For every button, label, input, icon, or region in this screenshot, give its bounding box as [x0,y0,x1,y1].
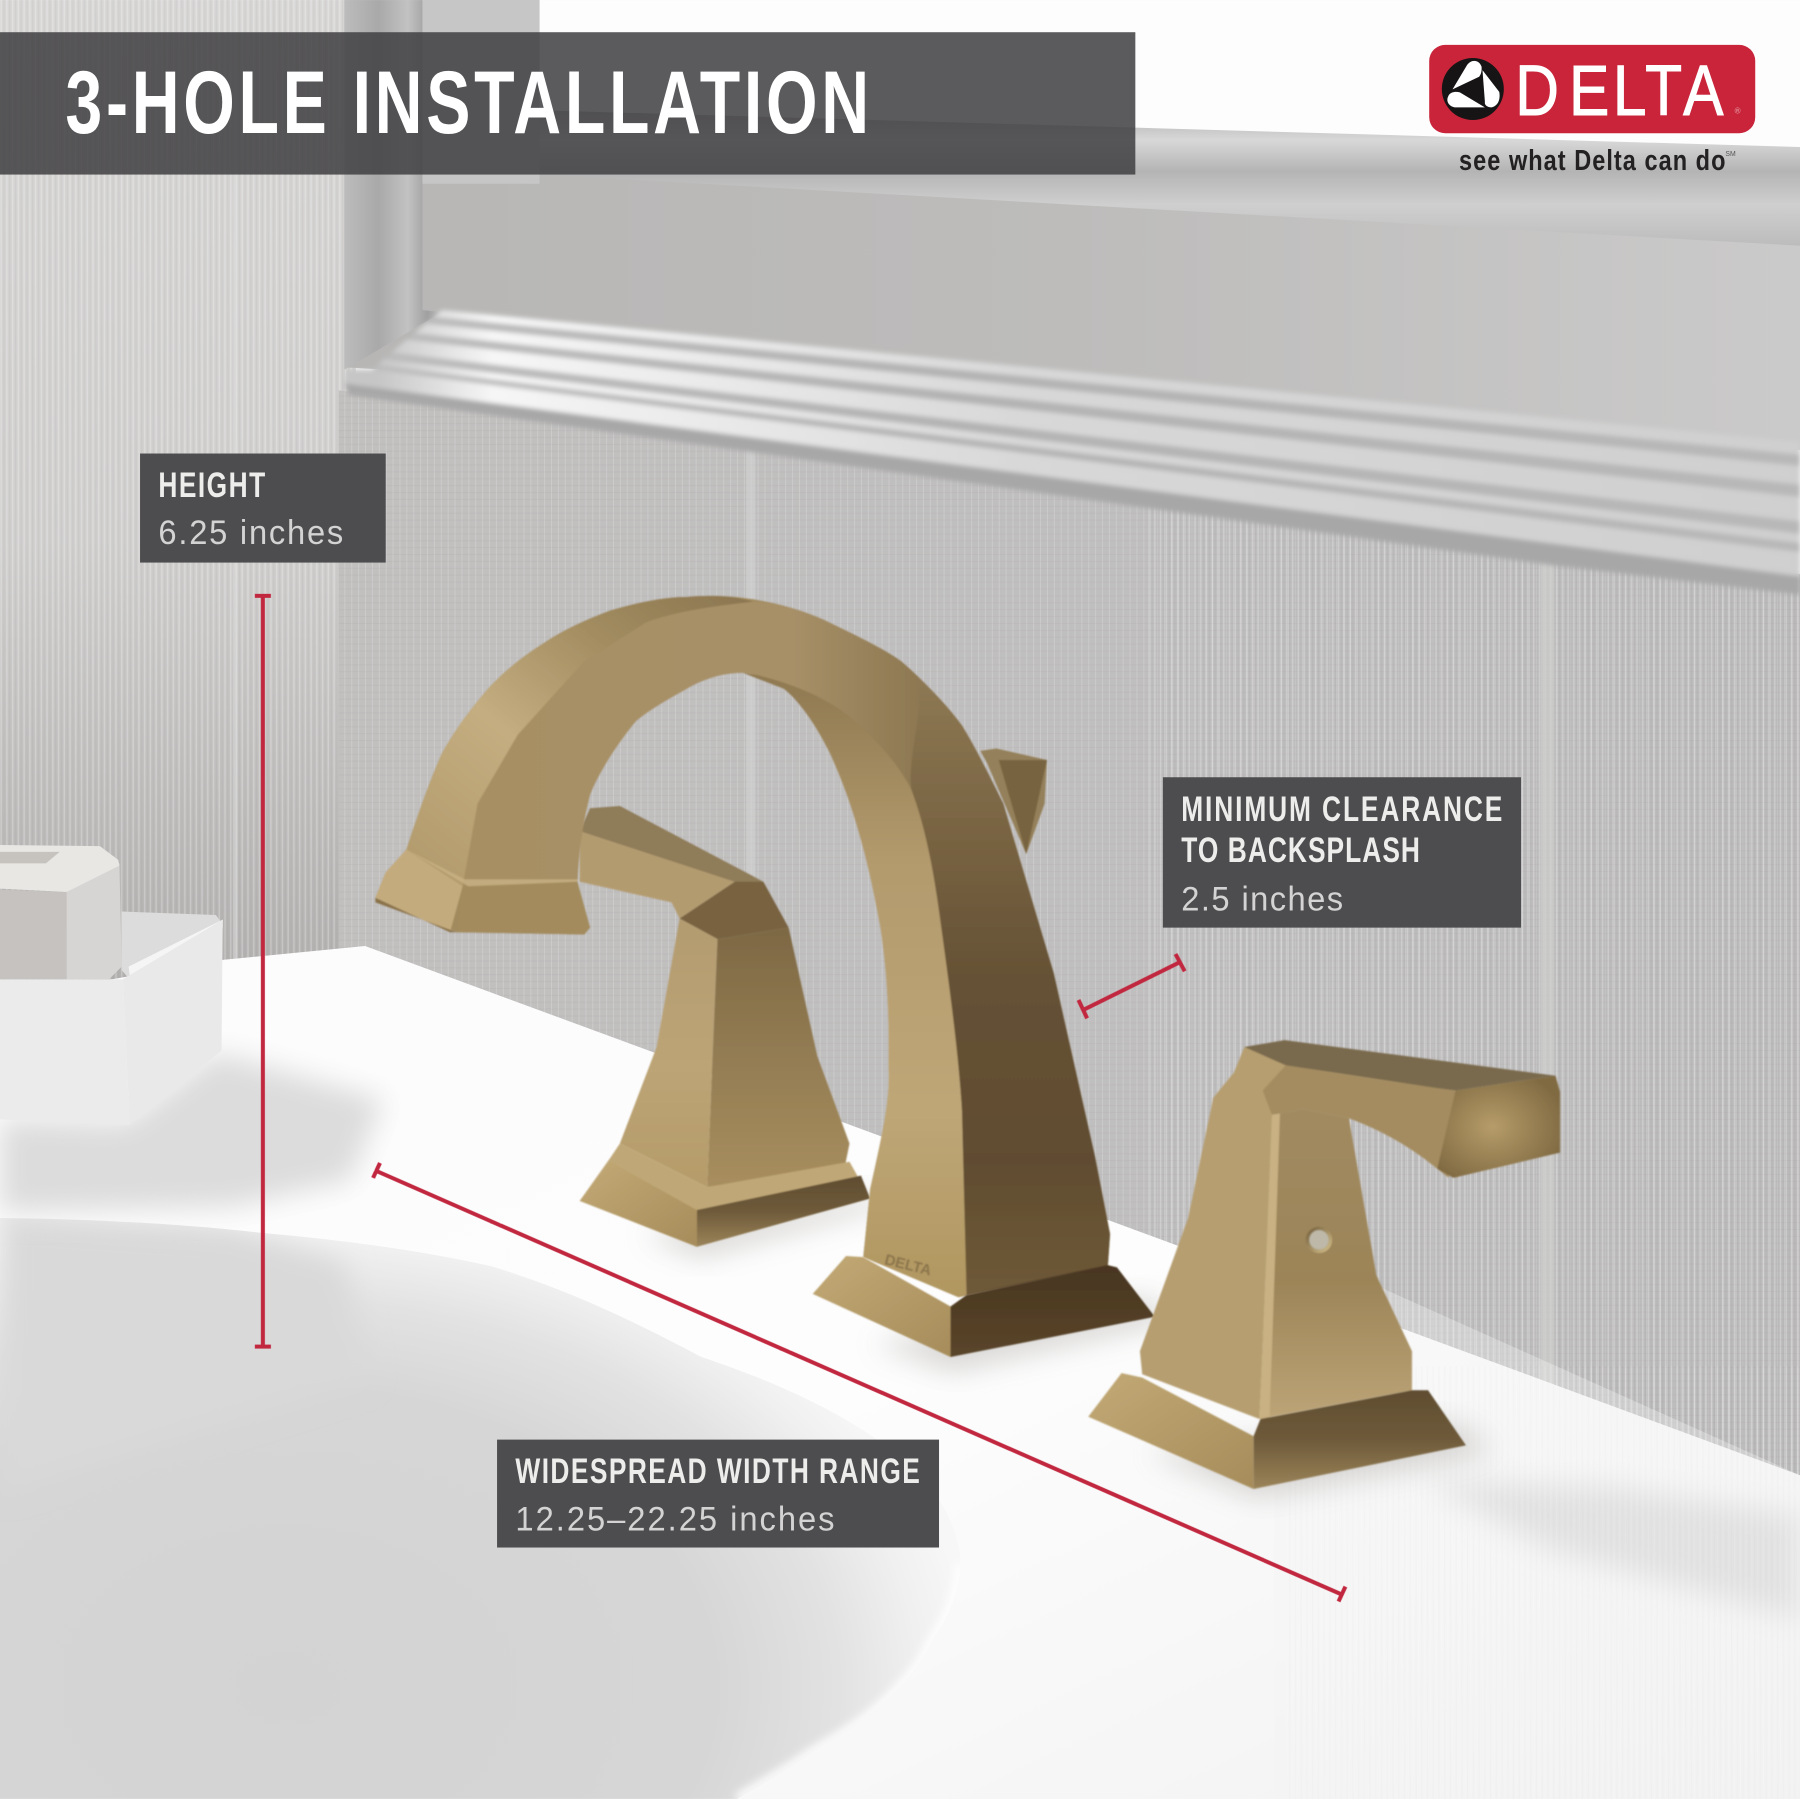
counter shadows under faucet [643,1194,1492,1498]
callout: minimum clearance: 2.5 inches [1181,881,1343,919]
dimension line: height [255,596,271,1347]
callout: widespread width range [497,1440,939,1548]
faucet rear handle [980,749,1047,854]
soap dish with soap [0,845,383,1212]
Delta logo: ® [1735,107,1741,116]
Delta logo [1429,45,1755,177]
callout: height: 6.25 inches [158,514,343,552]
handle set-screw hole [1306,1227,1332,1253]
faucet spout base [813,1251,1155,1357]
logo triangular mark [1447,61,1500,107]
callout: height: HEIGHT [158,465,265,505]
callout: widespread width range: 12.25–22.25 inches [515,1501,835,1539]
faucet spout [375,596,1110,1297]
title banner [0,32,1135,175]
logo mark on spout: DELTA [883,1251,933,1279]
counter and basin [0,946,1800,1799]
right handle base [1088,1373,1466,1489]
soap bar [0,845,122,979]
Delta logo: SM [1725,151,1736,158]
mirror frame molding [344,310,1800,595]
Delta logo: DELTA [1515,50,1723,130]
callout: minimum clearance [1163,777,1521,928]
callout: minimum clearance: TO BACKSPLASH [1181,830,1420,870]
title banner: 3-HOLE INSTALLATION [65,53,869,153]
callout: height [140,454,386,563]
faucet right handle [1088,1040,1560,1489]
callout: widespread width range: WIDESPREAD WIDTH RANGE [515,1451,920,1491]
dimension line: width [373,1163,1345,1601]
dimension line: clearance [1079,954,1185,1018]
faucet left handle [580,806,870,1247]
callout: minimum clearance: MINIMUM CLEARANCE [1181,789,1502,829]
Delta logo: see what Delta can do [1459,144,1725,177]
